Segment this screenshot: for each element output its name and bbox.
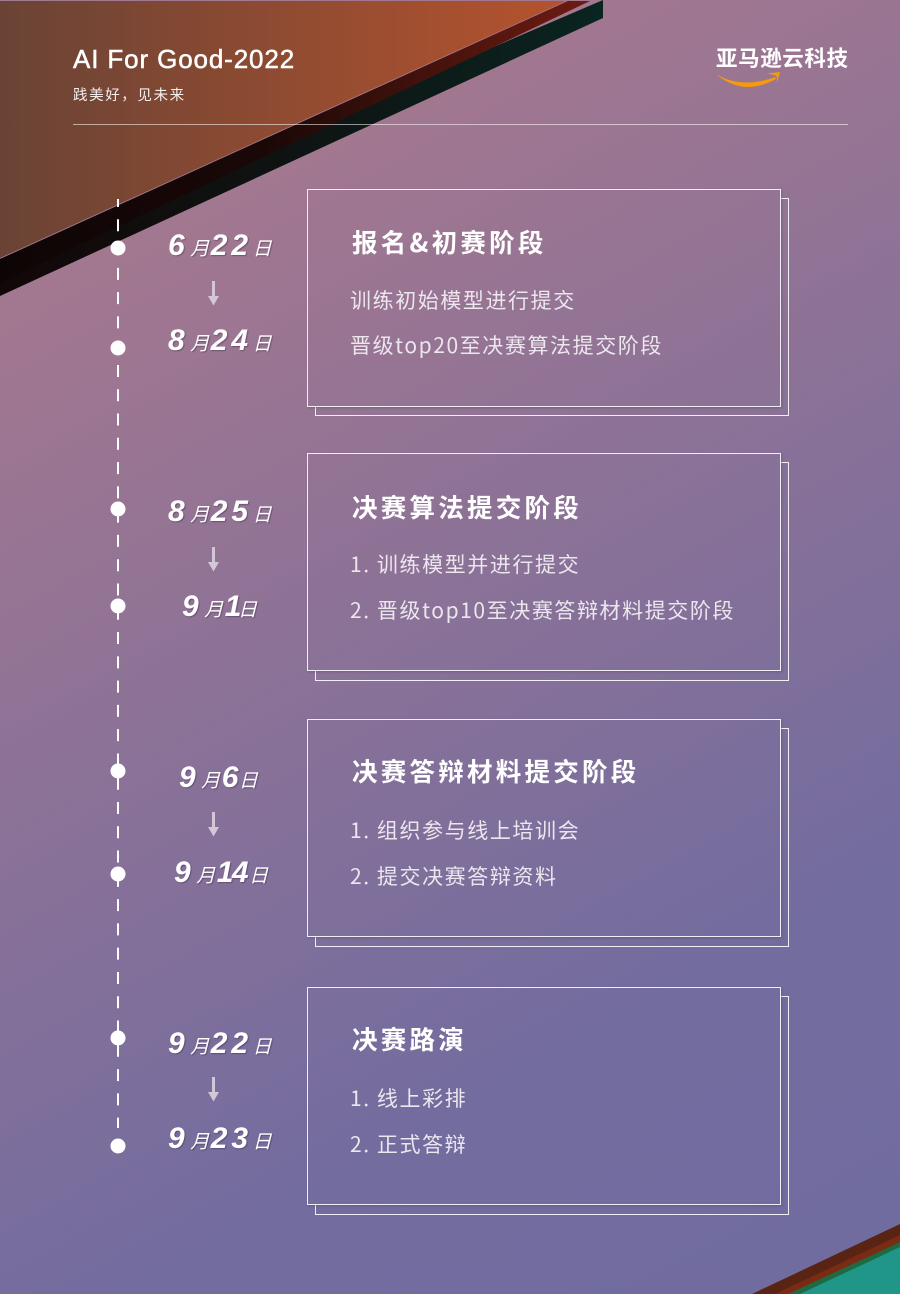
panel heading: 决赛答辩材料提交阶段 [352, 752, 640, 789]
panel heading: 报名&初赛阶段 [352, 223, 547, 260]
date: 9月22日: 9月22日 [168, 1027, 272, 1060]
header divider [73, 124, 848, 125]
body line: 2. 提交决赛答辩资料 [350, 861, 558, 891]
title: AI For Good-2022 [73, 44, 295, 74]
arrow [208, 1077, 219, 1102]
panel: final algorithm submission [307, 453, 789, 681]
date: 9月14日: 9月14日 [174, 856, 268, 889]
date: 9月1日: 9月1日 [182, 590, 257, 623]
logo: AWS China [716, 42, 849, 87]
icon: orange smile arrow [716, 72, 780, 87]
body line: 2. 正式答辩 [350, 1129, 467, 1159]
panel: final defense materials [307, 719, 789, 947]
arrow [208, 547, 219, 572]
body line: 训练初始模型进行提交 [350, 285, 576, 315]
date: 6月22日: 6月22日 [168, 229, 272, 262]
logo text: 亚马逊云科技 [716, 42, 849, 73]
date: 9月6日: 9月6日 [179, 761, 258, 794]
arrow [208, 812, 219, 836]
panel heading: 决赛路演 [352, 1020, 467, 1057]
date: 8月24日: 8月24日 [168, 324, 272, 357]
panel: registration and preliminary [307, 189, 789, 416]
date: 9月23日: 9月23日 [168, 1122, 272, 1155]
panel: final roadshow [307, 987, 789, 1215]
body line: 晋级top20至决赛算法提交阶段 [350, 330, 663, 360]
background shape: top-left diagonal band [0, 0, 603, 296]
arrow [208, 281, 219, 306]
body line: 1. 组织参与线上培训会 [350, 815, 580, 845]
panel heading: 决赛算法提交阶段 [352, 488, 582, 525]
timeline: dashed line with dots [110, 199, 126, 1154]
body line: 1. 线上彩排 [350, 1083, 467, 1113]
subtitle: 践美好，见未来 [73, 84, 186, 105]
body line: 2. 晋级top10至决赛答辩材料提交阶段 [350, 595, 735, 625]
background shape: bottom-right diagonal band [752, 1224, 900, 1294]
body line: 1. 训练模型并进行提交 [350, 549, 580, 579]
date: 8月25日: 8月25日 [168, 495, 272, 528]
